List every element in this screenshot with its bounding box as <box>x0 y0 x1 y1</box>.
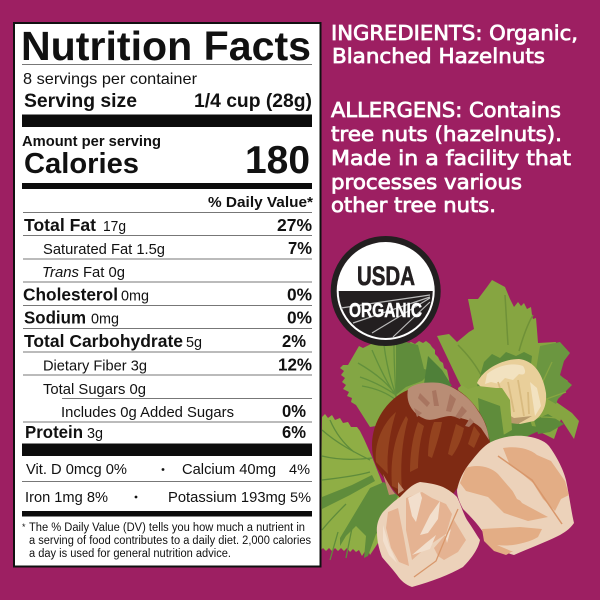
daily value heading: % Daily Value* <box>208 194 313 211</box>
row: added sugars: Includes 0g Added Sugars <box>61 404 234 421</box>
row: total fat: 17g <box>103 218 126 235</box>
row: iron and potassium: Iron 1mg 8% <box>25 490 108 506</box>
panel: nutrition facts label <box>14 23 320 566</box>
row: dietary fiber: 12% <box>278 354 312 374</box>
calories row <box>24 139 310 182</box>
icon: USDA organic seal: ORGANIC <box>349 300 422 322</box>
footnote: The % Daily Value (DV) tells you how much a nutrient in <box>29 522 305 534</box>
calories row: 180 <box>245 139 310 182</box>
row: total fat: Total Fat <box>24 215 96 235</box>
row: trans fat: Fat 0g <box>83 264 125 281</box>
row: iron and potassium: Potassium 193mg <box>168 490 286 506</box>
serving size row: 1/4 cup (28g) <box>194 91 312 112</box>
row: total carbohydrate <box>24 331 306 351</box>
text block: allergens <box>331 98 571 217</box>
hazelnut: blanched right <box>457 436 574 555</box>
leaf: upper left <box>340 341 452 427</box>
text block: ingredients <box>331 21 578 68</box>
hazelnut: shelled tan <box>477 359 546 424</box>
row: dietary fiber: Dietary Fiber 3g <box>43 358 147 374</box>
row: cholesterol: Cholesterol <box>23 284 118 304</box>
icon: USDA organic seal: USDA <box>357 261 415 291</box>
row: protein <box>25 422 306 442</box>
row: cholesterol: 0mg <box>121 288 149 304</box>
row: vitamin D and calcium <box>26 461 310 478</box>
serving size row: Serving size <box>24 91 137 112</box>
row: vitamin D and calcium: Vit. D 0mcg 0% <box>26 462 127 478</box>
title: Nutrition Facts <box>21 23 311 69</box>
icon: USDA organic seal <box>331 236 441 346</box>
servings per container: 8 servings per container <box>23 71 198 88</box>
row: sodium: 0% <box>287 308 312 328</box>
row: total carbohydrate: 5g <box>186 334 202 351</box>
text block: allergens: processes various <box>331 170 522 194</box>
serving size row <box>24 91 312 112</box>
footnote: a serving of food contributes to a daily diet. 2,000 calories <box>29 535 311 547</box>
leaf: husk <box>458 385 512 446</box>
row: saturated fat: 7% <box>288 238 312 258</box>
row: total fat: 27% <box>277 215 312 235</box>
row: iron and potassium: 5% <box>290 489 311 505</box>
text block: allergens: ALLERGENS: Contains <box>331 98 561 122</box>
row: protein: 3g <box>87 425 103 442</box>
row: protein: Protein <box>25 422 83 442</box>
leaf: centre right <box>437 280 579 444</box>
leaf: lower left <box>320 414 400 560</box>
row: trans fat <box>42 264 125 281</box>
row: total carbohydrate: 2% <box>282 331 306 351</box>
footnote: * <box>22 522 26 532</box>
row: added sugars <box>61 401 306 421</box>
row: dietary fiber <box>43 354 312 374</box>
row: vitamin D and calcium: 4% <box>289 461 310 477</box>
row: total sugars: Total Sugars 0g <box>43 381 146 398</box>
row: sodium <box>24 308 312 328</box>
row: sodium: 0mg <box>91 310 119 328</box>
row: trans fat: Trans <box>42 264 79 281</box>
row: iron and potassium <box>25 489 311 506</box>
row: total fat <box>24 215 312 235</box>
row: saturated fat <box>43 238 312 258</box>
row: vitamin D and calcium: Calcium 40mg <box>182 462 276 478</box>
illustration: hazelnuts and leaves <box>320 280 579 587</box>
row: saturated fat: Saturated Fat 1.5g <box>43 241 165 258</box>
hazelnut: brown with shell <box>372 383 490 498</box>
row: cholesterol: 0% <box>287 284 312 304</box>
text block: ingredients: Blanched Hazelnuts <box>332 44 545 68</box>
text block: ingredients: INGREDIENTS: Organic, <box>331 21 578 45</box>
row: added sugars: 0% <box>282 401 306 421</box>
footnote <box>22 522 311 560</box>
row: protein: 6% <box>282 422 306 442</box>
amount per serving: Amount per serving <box>22 134 161 150</box>
text block: allergens: tree nuts (hazelnuts). <box>331 122 562 146</box>
row: cholesterol <box>23 284 312 304</box>
text block: allergens: Made in a facility that <box>331 146 571 170</box>
text block: allergens: other tree nuts. <box>331 193 496 217</box>
row: total carbohydrate: Total Carbohydrate <box>24 331 183 351</box>
row: sodium: Sodium <box>24 308 86 328</box>
footnote: a day is used for general nutrition advice. <box>29 548 231 560</box>
calories row: Calories <box>24 148 139 180</box>
hazelnut: blanched left <box>377 482 480 587</box>
